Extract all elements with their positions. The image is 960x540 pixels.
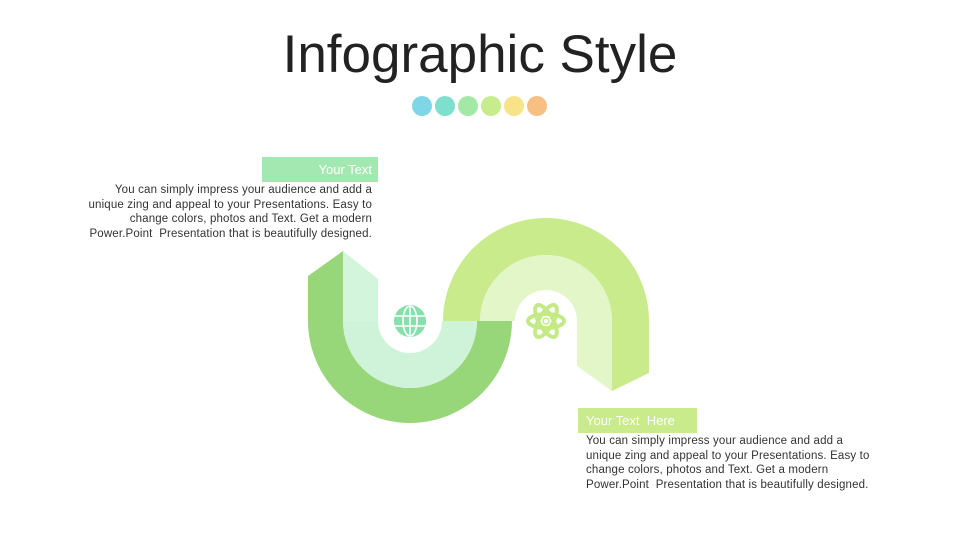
label box: Your Text: Your Text (318, 162, 372, 177)
title: Infographic Style (283, 25, 677, 84)
left U shape (308, 251, 512, 423)
text block right (586, 435, 870, 491)
text block left: You can simply impress your audience and add a (115, 184, 372, 196)
text block right: Power.Point Presentation that is beautifully designed. (586, 479, 869, 491)
text block left: Power.Point Presentation that is beautifully designed. (89, 228, 372, 240)
text block left: change colors, photos and Text. Get a modern (130, 213, 372, 225)
text block right: change colors, photos and Text. Get a modern (586, 464, 828, 476)
right arch shape (443, 218, 649, 391)
icon: atom (528, 302, 564, 340)
label box: Your Text Here: Your Text Here (586, 413, 675, 428)
icon: globe (394, 305, 426, 337)
text block right: You can simply impress your audience and add a (586, 435, 843, 447)
label box: Your Text (262, 157, 378, 182)
text block left (88, 184, 372, 240)
text block right: unique zing and appeal to your Presentations. Easy to (586, 450, 870, 462)
label box: Your Text Here (578, 408, 697, 433)
text block left: unique zing and appeal to your Presentations. Easy to (88, 199, 372, 211)
